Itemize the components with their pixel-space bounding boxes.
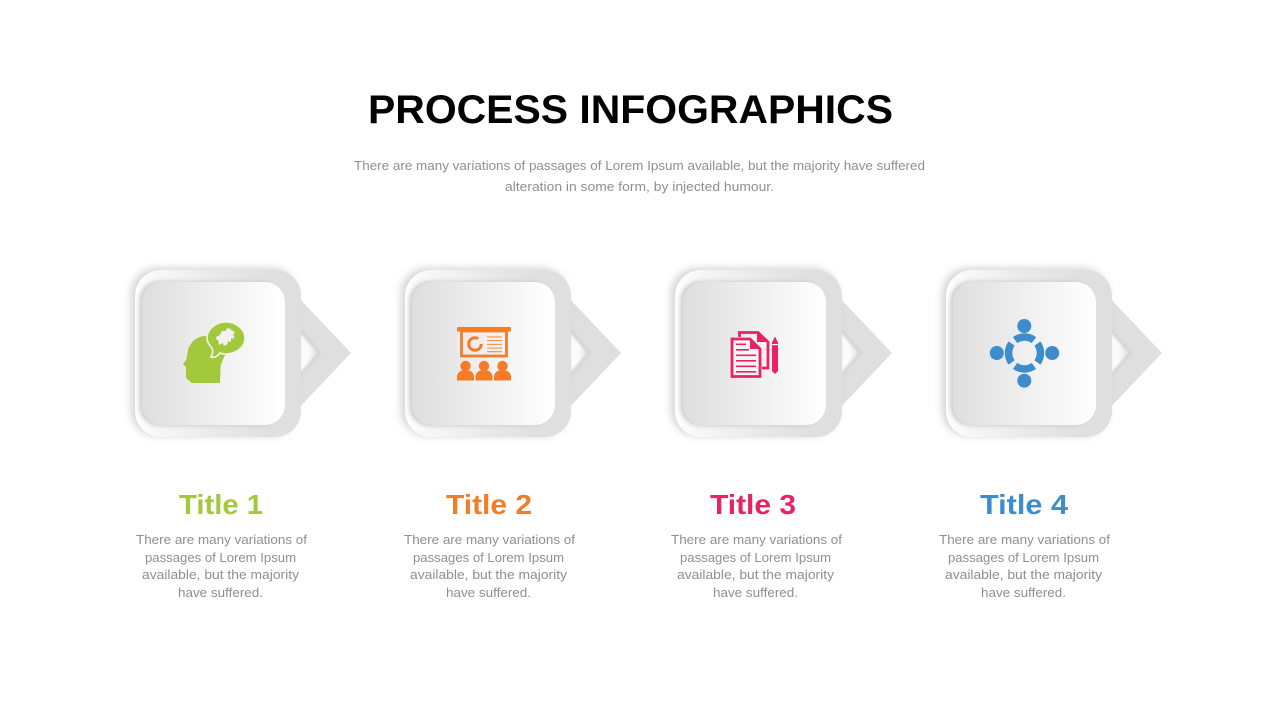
- subtitle text: There are many variations of passages of Lorem Ipsum available, but the majority have suffered: [354, 159, 925, 173]
- step 1 card: [131, 268, 351, 437]
- inner tile 3: [680, 281, 826, 426]
- icon: documents and pencil: [732, 332, 778, 376]
- title: PROCESS INFOGRAPHICS: [368, 88, 893, 132]
- step 3 text: [671, 489, 843, 600]
- description 3: passages of Lorem Ipsum: [680, 551, 831, 565]
- description 4: There are many variations of: [939, 533, 1111, 547]
- inner tile 1: [139, 281, 285, 426]
- description 4: available, but the majority: [945, 568, 1103, 582]
- description 3: There are many variations of: [671, 533, 843, 547]
- outer tile 3: [671, 268, 842, 437]
- heading: title 4: Title 4: [980, 489, 1068, 520]
- outer tile 1: [131, 268, 301, 437]
- icon: presentation audience: [457, 327, 511, 380]
- heading: title 2: Title 2: [446, 489, 532, 520]
- inner tile 2: [409, 281, 555, 426]
- description 1: [136, 533, 308, 600]
- step 4 card: [942, 268, 1162, 437]
- description 4: passages of Lorem Ipsum: [948, 551, 1099, 565]
- description 1: passages of Lorem Ipsum: [145, 551, 296, 565]
- inner tile 4: [950, 281, 1096, 426]
- heading: title 1: Title 1: [179, 489, 263, 520]
- description 4: have suffered.: [981, 586, 1066, 600]
- arrow 4: [1107, 295, 1162, 411]
- description 2: available, but the majority: [410, 568, 568, 582]
- arrow 2: [566, 295, 621, 411]
- description 2: [404, 533, 576, 600]
- description 1: available, but the majority: [142, 568, 300, 582]
- icon: four people in a circle: [990, 319, 1059, 388]
- heading: title 3: Title 3: [710, 489, 796, 520]
- description 2: have suffered.: [446, 586, 531, 600]
- description 1: There are many variations of: [136, 533, 308, 547]
- step 3 card: [671, 268, 892, 437]
- description 3: available, but the majority: [677, 568, 835, 582]
- step 1 text: [136, 489, 308, 600]
- description 3: have suffered.: [713, 586, 798, 600]
- step 2 card: [401, 268, 621, 437]
- outer tile 2: [401, 268, 571, 437]
- icon: head with puzzle: [183, 322, 245, 383]
- outer tile 4: [942, 268, 1112, 437]
- description 2: passages of Lorem Ipsum: [413, 551, 564, 565]
- arrow 1: [296, 295, 351, 411]
- description 3: [671, 533, 843, 600]
- description 2: There are many variations of: [404, 533, 576, 547]
- arrow 3: [837, 295, 892, 411]
- description 4: [939, 533, 1111, 600]
- subtitle text: [354, 159, 925, 194]
- description 1: have suffered.: [178, 586, 263, 600]
- step 2 text: [404, 489, 576, 600]
- step 4 text: [939, 489, 1111, 600]
- subtitle text: alteration in some form, by injected humour.: [505, 180, 774, 194]
